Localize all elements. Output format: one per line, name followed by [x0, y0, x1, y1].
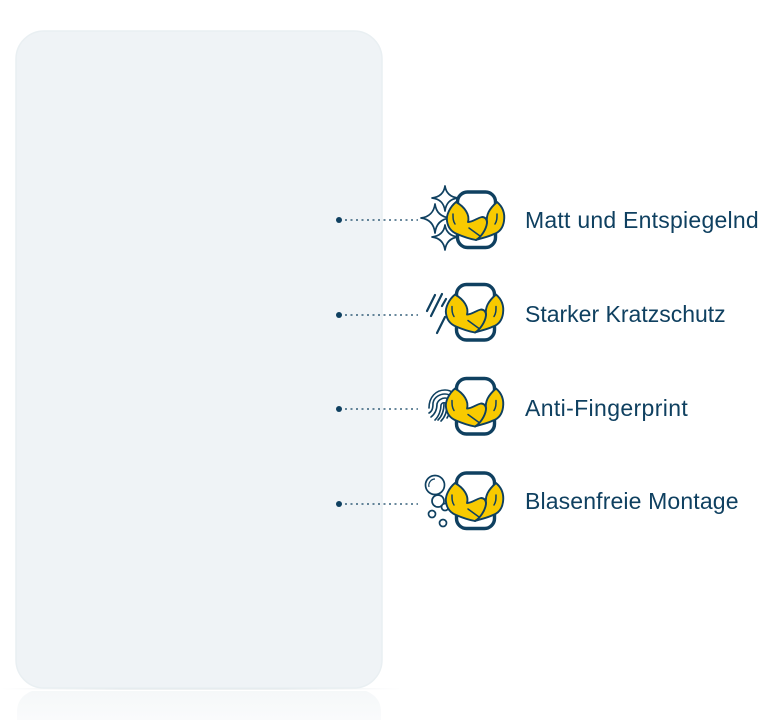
icon: bubbles: [426, 476, 448, 526]
icon: fingerprint: [429, 390, 453, 421]
label: matt: Matt und Entspiegelnd: [525, 207, 759, 233]
icon: scratches: [427, 294, 446, 333]
label: bubble-free: Blasenfreie Montage: [525, 488, 739, 514]
leader line: matt: [336, 217, 418, 223]
leader line: anti-fingerprint: [336, 406, 418, 412]
leader line: scratch protection: [336, 312, 418, 318]
icon: muscle arms and phone, fingerprint: [446, 378, 503, 434]
reflection below the protector: [0, 688, 402, 720]
icon: muscle arms and phone, scratch: [446, 284, 503, 340]
icon: sparkles: [421, 186, 458, 250]
panel: screen protector: [16, 31, 382, 688]
label: scratch protection: Starker Kratzschutz: [525, 301, 726, 327]
leader line: bubble-free: [336, 501, 418, 507]
icon: muscle arms and phone, bubbles: [446, 473, 503, 528]
icon: muscle arms and phone, matt: [447, 192, 504, 248]
label: anti-fingerprint: Anti-Fingerprint: [525, 395, 688, 421]
